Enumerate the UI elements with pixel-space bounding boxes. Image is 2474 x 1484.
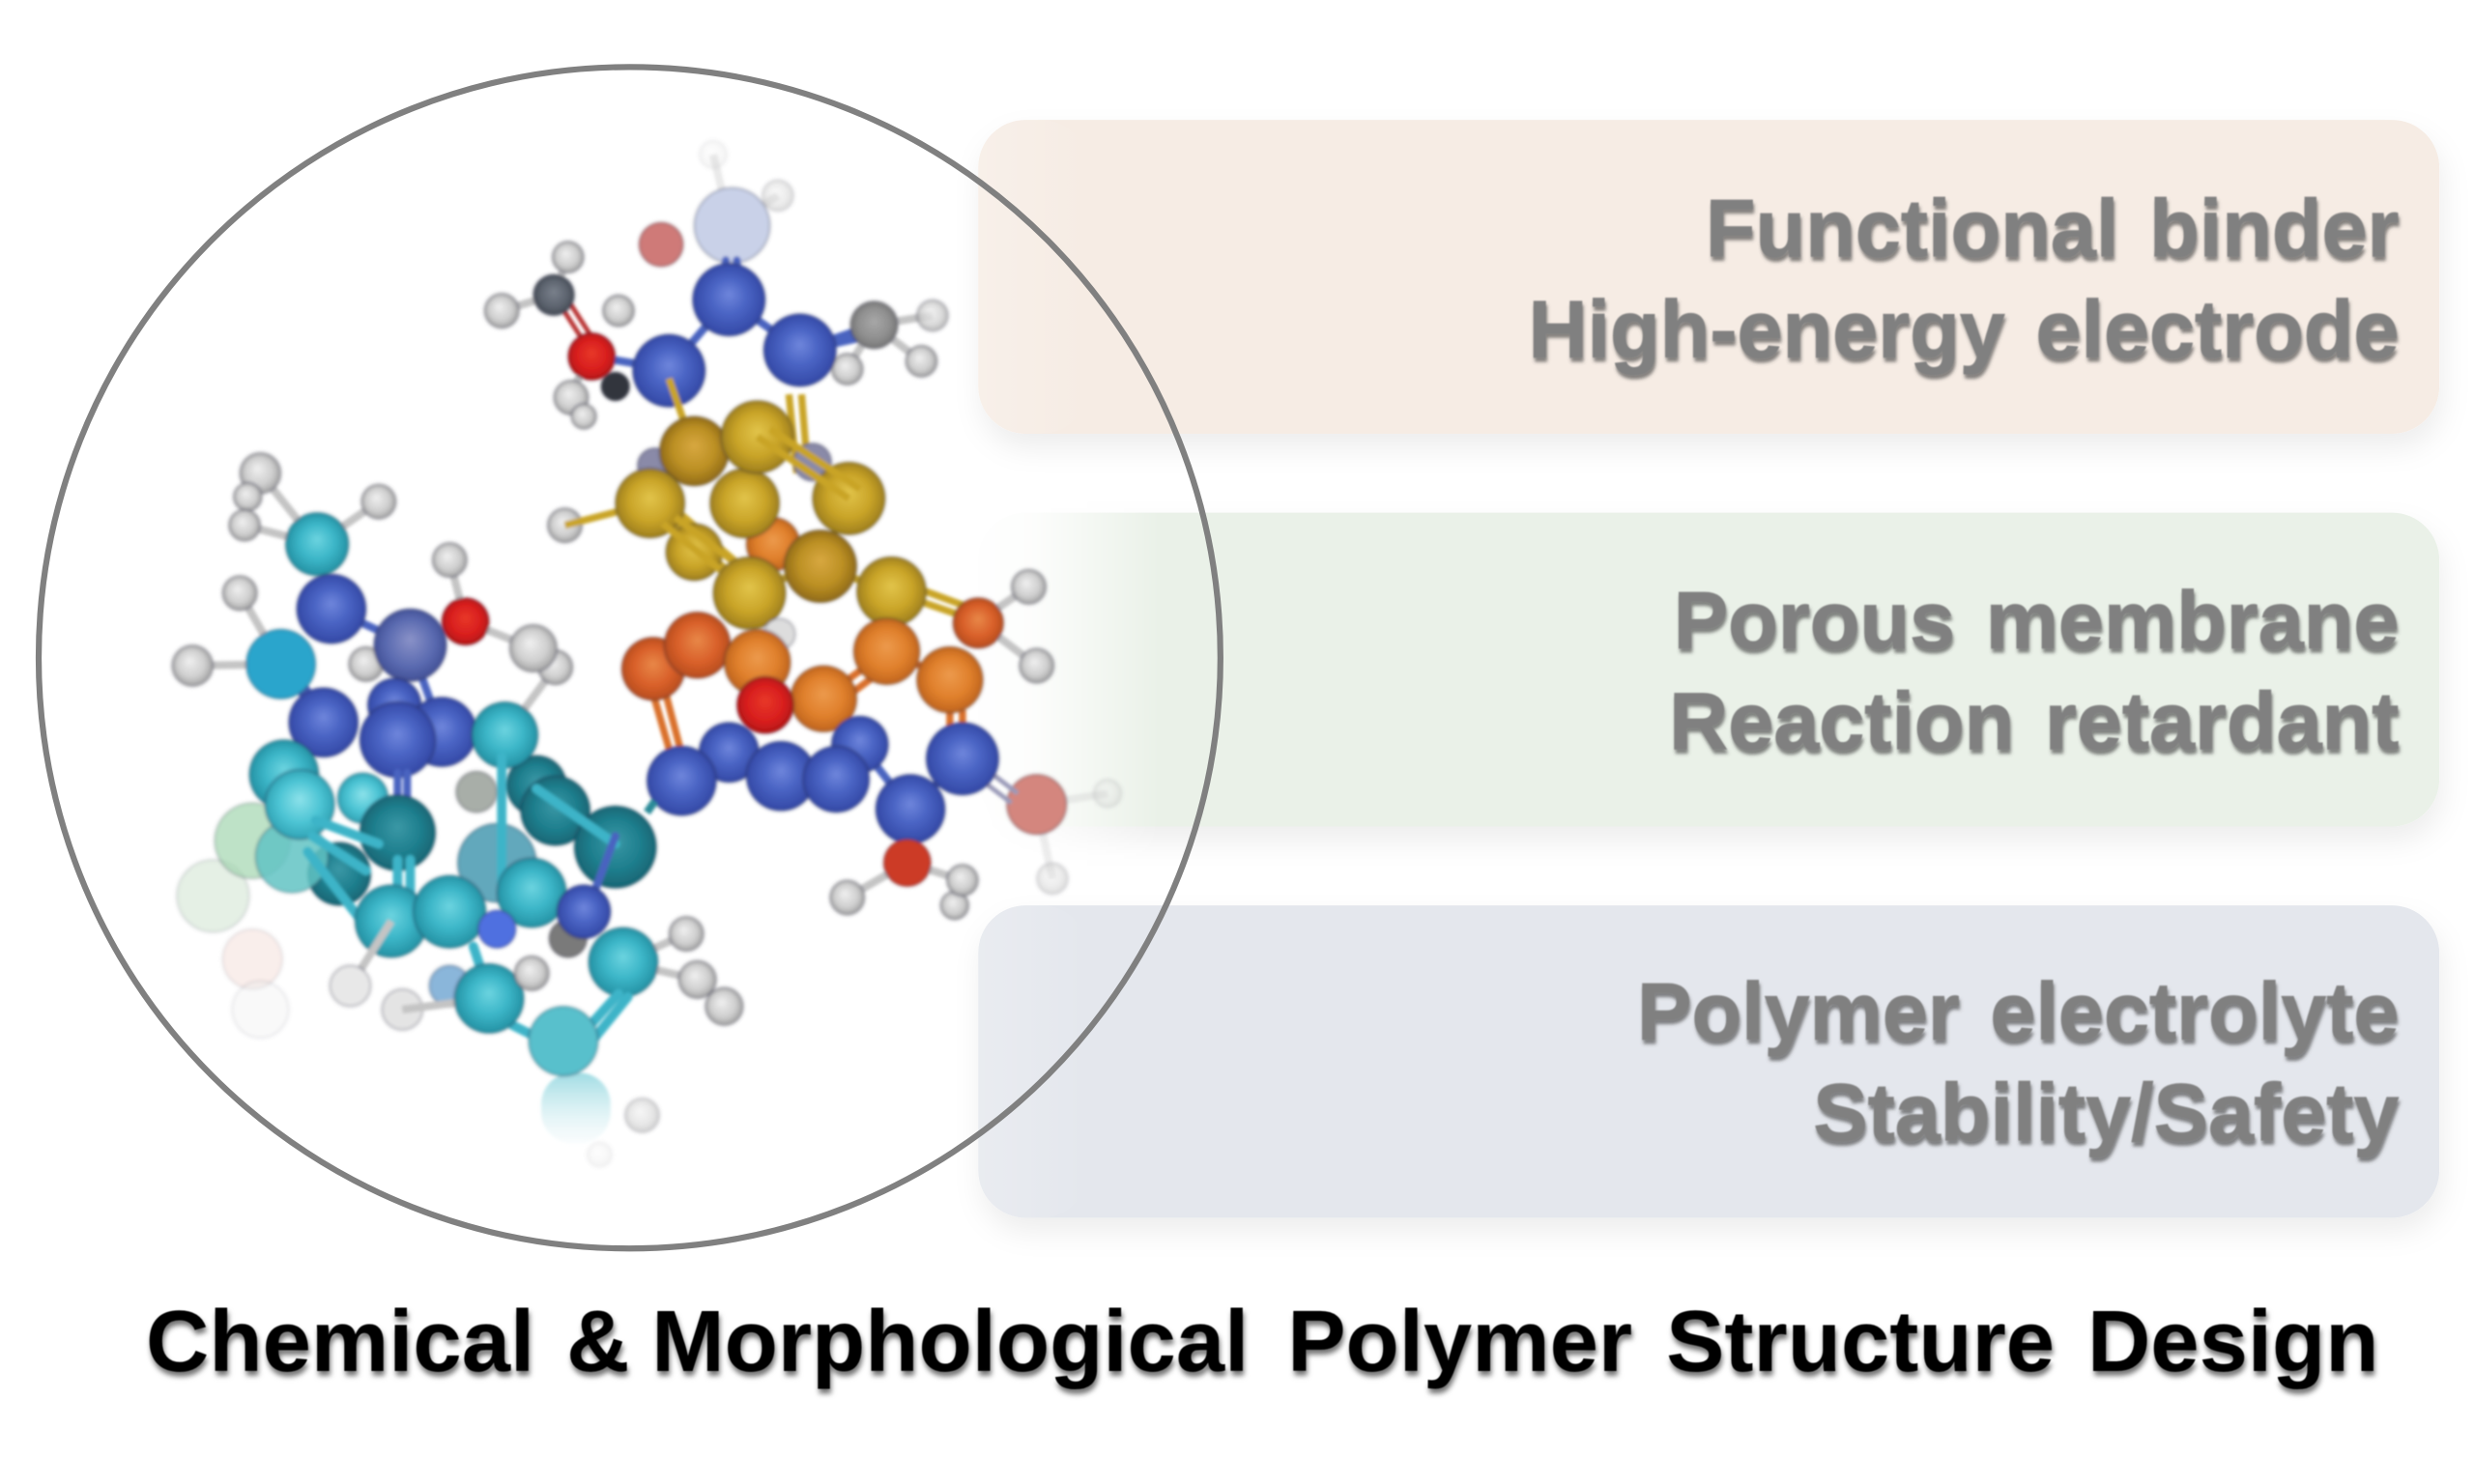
title: &	[566, 1293, 654, 1390]
molecule fragment: orange ring cluster	[621, 569, 1054, 754]
circle outline	[39, 67, 1221, 1248]
title: Morphological	[651, 1293, 1273, 1390]
molecule fragment: lower teal cluster with faded atoms	[177, 757, 743, 1167]
panel: functional binder / high-energy electrode	[978, 120, 2439, 434]
title: Chemical	[146, 1293, 559, 1390]
label: functional binder: Functional binder	[1706, 182, 2399, 273]
title: Structure	[1666, 1293, 2079, 1390]
label: polymer electrolyte: Polymer electrolyte	[1637, 965, 2399, 1057]
title: Design	[2087, 1293, 2379, 1390]
label: high-energy electrode: High-energy electrode	[1528, 283, 2399, 375]
molecule fragment: yellow ring cluster	[548, 379, 982, 629]
label: stability and safety: Stability/Safety	[1813, 1066, 2399, 1157]
title: Polymer	[1287, 1293, 1656, 1390]
panel: polymer electrolyte / stability and safety	[978, 905, 2439, 1217]
label: porous membrane: Porous membrane	[1674, 574, 2399, 666]
molecule fragment: blue chain with oxygen ends	[647, 716, 1122, 920]
panel: porous membrane / reaction retardant	[978, 513, 2439, 827]
molecule fragment: upper blue and gray cluster	[484, 140, 948, 429]
molecule: ball and stick polymer model	[172, 140, 1122, 1167]
molecule fragment: left teal and blue cluster	[172, 453, 573, 823]
label: reaction retardant: Reaction retardant	[1669, 675, 2399, 767]
